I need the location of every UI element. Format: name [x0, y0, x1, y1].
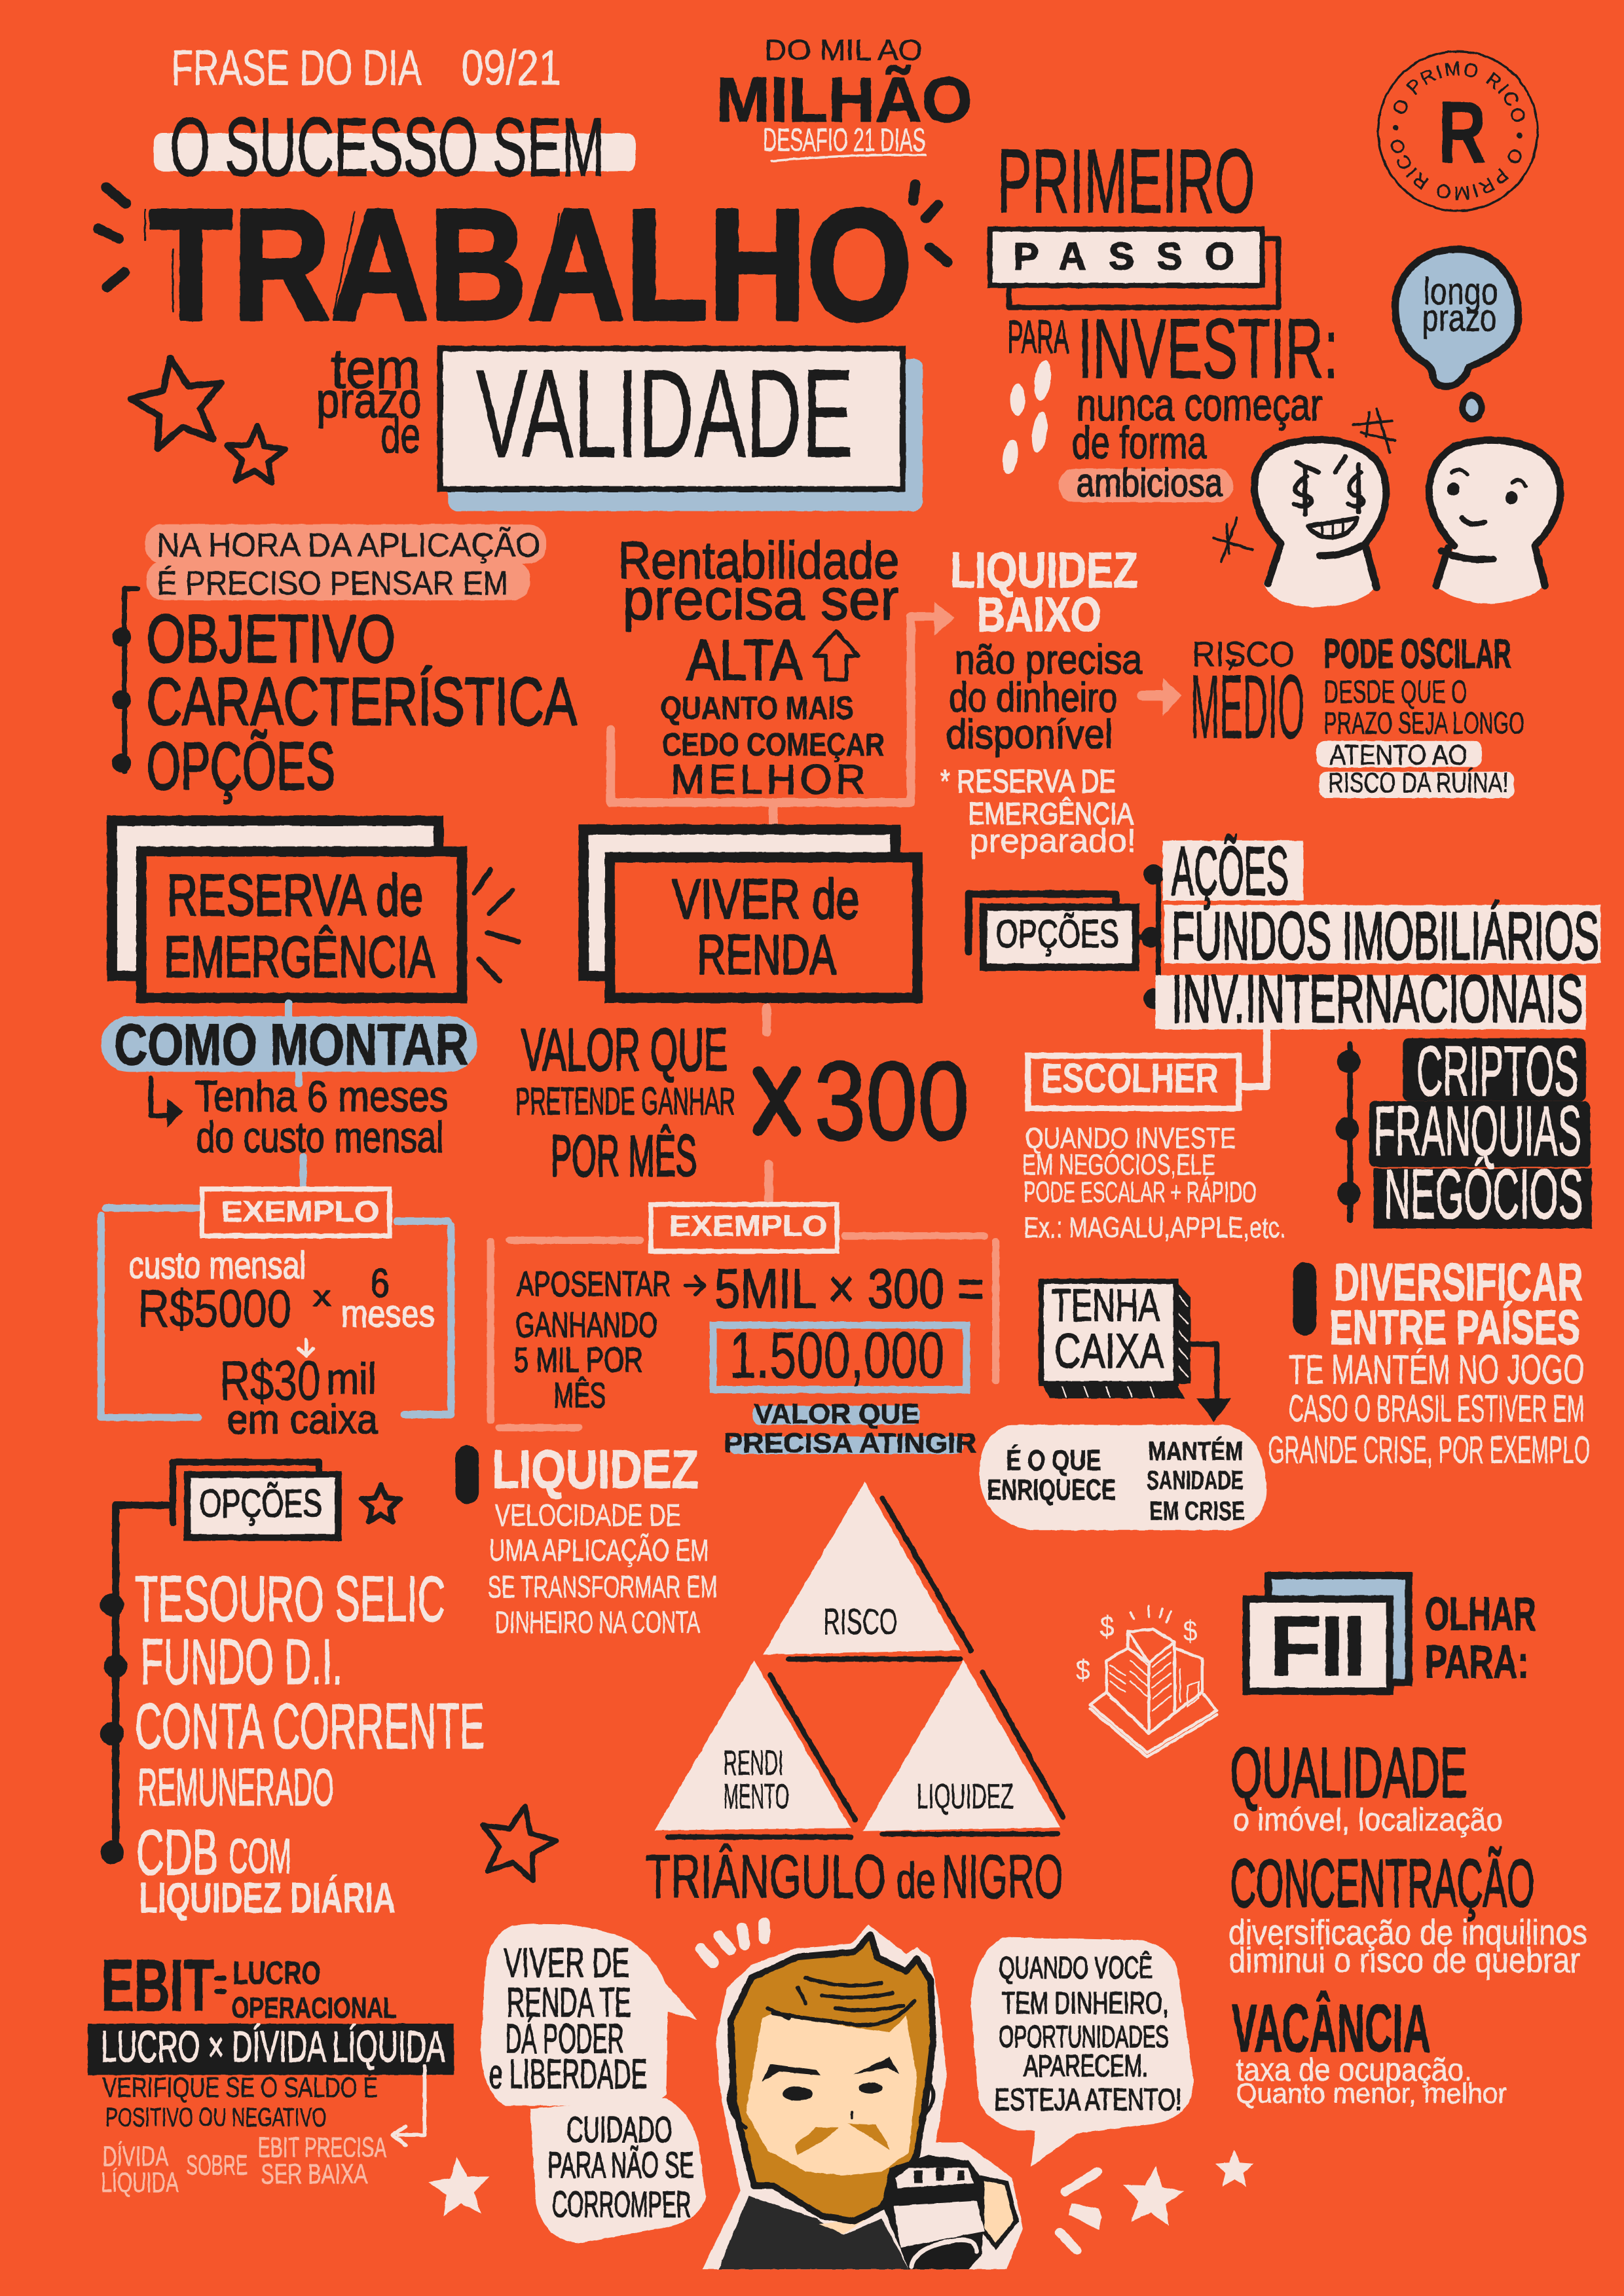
panel: ebit: SER BAIXA [261, 2159, 368, 2190]
hair strokes [767, 1978, 914, 2025]
bubble: cuidado: PARA NÃO SE [547, 2144, 694, 2185]
bubble: cuidado: CUIDADO [566, 2109, 672, 2150]
panel: exemplo viver de renda: 5 MIL POR [514, 1341, 643, 1380]
panel: rentabilidade: Rentabilidade [618, 531, 899, 590]
icon: star beside opções [361, 1485, 400, 1522]
bubble: é o que enriquece, mantém sanidade: ENRIQUECE [987, 1474, 1116, 1506]
panel: escolher: ESCOLHER [1041, 1056, 1219, 1102]
bubble: quando você tem dinheiro [971, 1937, 1194, 2167]
text: tem prazo de: prazo [316, 373, 422, 428]
panel: valor que pretende ganhar x 300 [515, 1008, 969, 1201]
bubble: viver de renda: e LIBERDADE [489, 2051, 647, 2097]
panel: validade: VALIDADE [476, 343, 854, 484]
arrow: down to bubble [1190, 1344, 1217, 1400]
panel: exemplo viver de renda: 5MIL × 300 = [714, 1258, 984, 1320]
panel: primeiro passo para investir [990, 130, 1338, 505]
face [746, 2013, 917, 2176]
panel: liquidez definition: DINHEIRO NA CONTA [495, 1605, 700, 1639]
panel: primeiro passo para investir: nunca começar [1077, 379, 1322, 430]
panel: na hora da aplicação [112, 524, 577, 804]
text: longo prazo: longo [1424, 270, 1498, 313]
panel: ebit: EBIT [101, 1944, 213, 2026]
panel: criptos franquias negócios [1335, 1032, 1592, 1233]
panel: liquidez baixo [940, 543, 1142, 860]
headline: trabalho: TRABALHO [149, 177, 912, 354]
icon: building with dollars: $ [1100, 1610, 1115, 1643]
panel: reserva de emergência: RESERVA de [167, 862, 423, 928]
panel: risco médio: ATENTO AO [1330, 740, 1467, 771]
panel: exemplo reserva: R$5000 [138, 1279, 291, 1338]
headline: o sucesso sem [154, 101, 636, 194]
panel: rentabilidade: ALTA [687, 629, 802, 692]
bubble: quando você tem dinheiro: APARECEM. [1024, 2049, 1148, 2083]
panel: risco médio: MÉDIO [1190, 656, 1304, 757]
panel: ebit: LÍQUIDA [101, 2168, 179, 2198]
text: longo prazo: prazo [1422, 297, 1496, 339]
mustache [795, 2127, 840, 2155]
panel: liquidez baixo: BAIXO [977, 587, 1101, 642]
arrow: salmon connector to liquidez [611, 602, 955, 823]
panel: liquidez baixo: do dinheiro [949, 675, 1117, 721]
text: tem prazo de [316, 338, 422, 464]
panel: diversificar entre países [1268, 1253, 1591, 1471]
panel: ebit: LUCRO [233, 1956, 321, 1992]
bubble: cuidado [530, 2098, 706, 2243]
bubble: é o que enriquece, mantém sanidade: EM CRISE [1149, 1497, 1245, 1526]
panel: escolher [1022, 1029, 1285, 1244]
panel: na hora da aplicação: NA HORA DA APLICAÇÃO [157, 526, 540, 564]
panel: exemplo reserva: em caixa [227, 1397, 378, 1443]
nose [851, 2112, 853, 2119]
bubble: é o que enriquece, mantém sanidade: SANIDADE [1147, 1466, 1244, 1495]
left character, ambitious [1213, 409, 1395, 608]
panel: como montar: COMO MONTAR [114, 1011, 469, 1077]
hand [982, 2178, 1016, 2246]
triangle: rendimento [655, 1660, 855, 1837]
panel: opções reserva: LIQUIDEZ DIÁRIA [139, 1874, 396, 1922]
panel: exemplo reserva: R$30 [219, 1350, 321, 1412]
panel: primeiro passo para investir: PRIMEIRO [997, 130, 1255, 232]
panel: opções de renda: AÇÕES [1172, 833, 1289, 910]
triangle: risco: RISCO [823, 1601, 898, 1642]
panel: rentabilidade [618, 531, 899, 803]
panel: valor que pretende ganhar x 300: PRETENDE GANHAR [515, 1080, 735, 1123]
panel: rentabilidade: CEDO COMEÇAR [662, 727, 885, 763]
panel: exemplo viver de renda: GANHANDO [515, 1305, 657, 1345]
panel: na hora da aplicação: OPÇÕES [147, 729, 335, 804]
panel: opções reserva: REMUNERADO [138, 1758, 334, 1817]
logo: do mil ao milhão [716, 35, 972, 161]
panel: na hora da aplicação: É PRECISO PENSAR EM [157, 564, 508, 602]
triangle: rendimento: RENDI [724, 1743, 783, 1783]
panel: opções reserva: CDB [136, 1816, 218, 1888]
panel: opções de renda: OPÇÕES [996, 911, 1118, 956]
panel: risco médio: RISCO [1192, 635, 1295, 674]
panel: valor que pretende ganhar x 300: VALOR QUE [521, 1017, 728, 1084]
panel: opções reserva: FUNDO D.I. [141, 1626, 342, 1698]
illustration: bearded man with camera [701, 1923, 1101, 2269]
panel: ebit: VERIFIQUE SE O SALDO É [103, 2073, 378, 2104]
panel: exemplo viver de renda [490, 1205, 996, 1459]
panel: ebit [88, 1944, 454, 2198]
bubble: viver de renda [480, 1923, 697, 2105]
small thought circle [1463, 395, 1481, 419]
camera [881, 2155, 985, 2269]
panel: FII olhar para: OLHAR [1425, 1588, 1536, 1640]
sticker outline [703, 1925, 1023, 2269]
panel: FII olhar para: PARA: [1425, 1636, 1529, 1688]
icon: large star [125, 350, 231, 452]
panel: FII olhar para [1246, 1576, 1536, 1694]
panel: opções reserva [100, 1462, 485, 1922]
panel: liquidez baixo: EMERGÊNCIA [968, 796, 1134, 831]
panel: exemplo reserva: x [314, 1281, 331, 1313]
bubble: quando você tem dinheiro: OPORTUNIDADES [999, 2019, 1169, 2054]
panel: qualidade concentração vacância [1228, 1733, 1587, 2109]
panel: exemplo viver de renda: MÊS [553, 1376, 606, 1415]
panel: exemplo viver de renda: 1.500,000 [729, 1319, 944, 1393]
bubble: quando você tem dinheiro: ESTEJA ATENTO! [994, 2082, 1182, 2117]
panel: opções reserva: CONTA CORRENTE [135, 1690, 485, 1762]
panel: primeiro passo para investir: INVESTIR: [1078, 302, 1338, 396]
panel: primeiro passo para investir: PARA [1008, 311, 1069, 363]
panel: viver de renda [583, 829, 917, 998]
arrow: to risco médio [1142, 678, 1182, 716]
panel: risco médio: RISCO DA RUÍNA! [1328, 768, 1508, 799]
icon: building with dollars [1076, 1607, 1217, 1757]
panel: viver de renda: VIVER de [672, 868, 860, 930]
arrow: to ebit precisa [392, 2066, 425, 2145]
panel: liquidez baixo: disponível [946, 712, 1113, 757]
panel: liquidez definition [455, 1438, 718, 1639]
panel: rentabilidade: MELHOR [671, 757, 866, 803]
panel: rentabilidade: QUANTO MAIS [661, 690, 854, 726]
panel: tenha caixa: CAIXA [1054, 1324, 1164, 1378]
icon: light star lower right [1119, 2162, 1187, 2227]
panel: qualidade concentração vacância: taxa de ocupação. [1236, 2052, 1471, 2088]
panel: validade [440, 343, 923, 511]
bubble: é o que enriquece, mantém sanidade: MANTÉM [1148, 1436, 1244, 1466]
bubble: viver de renda: RENDA TE [507, 1980, 631, 2026]
panel: qualidade concentração vacância: o imóvel, localização [1233, 1802, 1502, 1838]
panel: reserva de emergência [112, 821, 519, 998]
panel: exemplo reserva [101, 1157, 451, 1443]
panel: ebit: LUCRO × DÍVIDA LÍQUIDA [101, 2022, 445, 2071]
bubble: quando você tem dinheiro: TEM DINHEIRO, [1002, 1985, 1169, 2020]
panel: risco médio [1190, 631, 1524, 799]
panel: primeiro passo para investir: de forma [1072, 417, 1207, 468]
panel: exemplo reserva: 6 [371, 1261, 390, 1307]
panel: reserva de emergência: EMERGÊNCIA [164, 924, 435, 989]
panel: opções reserva: OPÇÕES [199, 1481, 322, 1525]
panel: risco médio: DESDE QUE O [1324, 674, 1467, 710]
icon: light star lower left [426, 2155, 492, 2217]
bubble: é o que enriquece, mantém sanidade: É O QUE [1006, 1444, 1101, 1477]
panel: primeiro passo para investir: ambiciosa [1077, 460, 1223, 505]
panel: qualidade concentração vacância: diminui o risco de quebrar [1228, 1941, 1580, 1980]
shirt [719, 2196, 909, 2269]
panel: como montar: Tenha 6 meses [194, 1072, 448, 1121]
panel: ebit: EBIT PRECISA [258, 2133, 387, 2164]
badge: o primo rico: • O PRIMO RICO • O PRIMO RICO [1391, 61, 1525, 200]
panel: liquidez baixo: LIQUIDEZ [950, 543, 1138, 598]
bubble: é o que enriquece, mantém sanidade [980, 1425, 1266, 1530]
panel: como montar [101, 1003, 477, 1162]
triangle: rendimento: MENTO [724, 1777, 789, 1816]
panel: como montar: do custo mensal [196, 1113, 444, 1162]
panel: opções reserva: TESOURO SELIC [135, 1563, 445, 1635]
panel: exemplo reserva: EXEMPLO [221, 1195, 379, 1228]
icon: building with dollars: $ [1076, 1654, 1090, 1686]
panel: exemplo viver de renda: PRECISA ATINGIR [724, 1429, 977, 1459]
panel: ebit: POSITIVO OU NEGATIVO [105, 2103, 327, 2132]
text: longo prazo [1422, 270, 1498, 339]
panel: exemplo viver de renda: APOSENTAR [517, 1264, 671, 1303]
logo: do mil ao milhão: MILHÃO [716, 65, 972, 136]
attention marks [701, 1923, 764, 1963]
rays around trabalho [98, 185, 948, 287]
panel: primeiro passo para investir: PASSO [1013, 236, 1234, 278]
panel: escolher: Ex.: MAGALU,APPLE,etc. [1024, 1212, 1285, 1244]
panel: escolher: QUANDO INVESTE [1025, 1122, 1236, 1155]
logo: do mil ao milhão: DO MIL AO [764, 35, 923, 67]
panel: opções de renda [969, 833, 1600, 1036]
text: tem prazo de: tem [331, 338, 420, 401]
neck [819, 2220, 865, 2234]
text: tem prazo de: de [380, 408, 420, 464]
panel: qualidade concentração vacância: VACÂNCIA [1232, 1990, 1431, 2066]
bubble: quando você tem dinheiro: QUANDO VOCÊ [999, 1950, 1153, 1985]
panel: exemplo reserva: meses [341, 1292, 435, 1335]
panel: opções reserva: COM [229, 1829, 291, 1884]
right character, calm [1429, 440, 1560, 604]
diagram: triângulo de nigro [646, 1482, 1063, 1911]
panel: FII olhar para: FII [1270, 1599, 1366, 1694]
panel: na hora da aplicação: CARACTERÍSTICA [147, 664, 577, 739]
panel: exemplo reserva: mil [327, 1355, 377, 1404]
triangle title: de [896, 1853, 936, 1909]
panel: liquidez definition: UMA APLICAÇÃO EM [489, 1533, 709, 1567]
panel: escolher: PODE ESCALAR + RÁPIDO [1024, 1176, 1257, 1209]
icon: thought characters and bubble [1213, 249, 1560, 608]
triangle: liquidez: LIQUIDEZ [917, 1777, 1013, 1816]
bracket with bullets [124, 589, 138, 772]
panel: valor que pretende ganhar x 300: POR MÊS [551, 1123, 697, 1188]
icon: footprints [1001, 359, 1054, 475]
header: frase do dia: 09/21 [461, 41, 561, 96]
panel: exemplo reserva: custo mensal [129, 1245, 306, 1287]
panel: viver de renda: RENDA [697, 924, 836, 986]
panel: ebit: SOBRE [186, 2150, 248, 2181]
thought bubble [1395, 249, 1519, 386]
panel: qualidade concentração vacância: Quanto menor, melhor [1236, 2079, 1507, 2109]
panel: valor que pretende ganhar x 300: 300 [814, 1039, 969, 1163]
panel: exemplo viver de renda: VALOR QUE [754, 1399, 919, 1430]
icon: building with dollars: $ [1183, 1614, 1197, 1647]
triangle: risco [763, 1482, 971, 1659]
triangle title: TRIÂNGULO [646, 1842, 886, 1911]
panel: ebit: OPERACIONAL [231, 1992, 397, 2024]
triangle: liquidez [862, 1660, 1063, 1834]
bubble: cuidado: CORROMPER [552, 2183, 692, 2225]
panel: liquidez definition: SE TRANSFORMAR EM [488, 1569, 718, 1604]
icon: turn arrow [151, 1078, 173, 1116]
panel: liquidez baixo: * RESERVA DE [940, 763, 1116, 799]
eyes [783, 2086, 813, 2101]
panel: na hora da aplicação: OBJETIVO [147, 601, 396, 676]
icon: up arrow [814, 631, 858, 680]
panel: liquidez definition: VELOCIDADE DE [495, 1498, 681, 1533]
icon: star near triangle [473, 1798, 562, 1884]
panel: escolher: EM NEGÓCIOS,ELE [1022, 1149, 1215, 1181]
header: frase do dia: FRASE DO DIA [172, 41, 422, 96]
eyebrows [762, 2064, 821, 2082]
panel: liquidez baixo: não precisa [955, 637, 1142, 683]
logo: do mil ao milhão: DESAFIO 21 DIAS [763, 122, 925, 158]
hair and beard [731, 1935, 933, 2221]
triangle title: NIGRO [942, 1842, 1063, 1911]
badge: o primo rico: R [1438, 84, 1486, 181]
ears [729, 2082, 933, 2127]
panel: risco médio: PRAZO SEJA LONGO [1324, 706, 1524, 740]
panel: liquidez baixo: preparado! [969, 822, 1136, 860]
panel: rentabilidade: precisa ser [622, 566, 899, 632]
icon: small light star [1215, 2149, 1254, 2187]
icon: small star [225, 424, 287, 484]
bubble: viver de renda: DÁ PODER [506, 2016, 624, 2062]
headline: o sucesso sem: O SUCESSO SEM [170, 101, 605, 194]
panel: exemplo viver de renda: EXEMPLO [669, 1211, 827, 1243]
panel: ebit: DÍVIDA [103, 2141, 169, 2172]
bubble: viver de renda: VIVER DE [504, 1940, 630, 1986]
panel: liquidez definition: LIQUIDEZ [492, 1438, 699, 1499]
panel: tenha caixa: TENHA [1052, 1279, 1160, 1330]
panel: tenha caixa [1041, 1279, 1232, 1422]
